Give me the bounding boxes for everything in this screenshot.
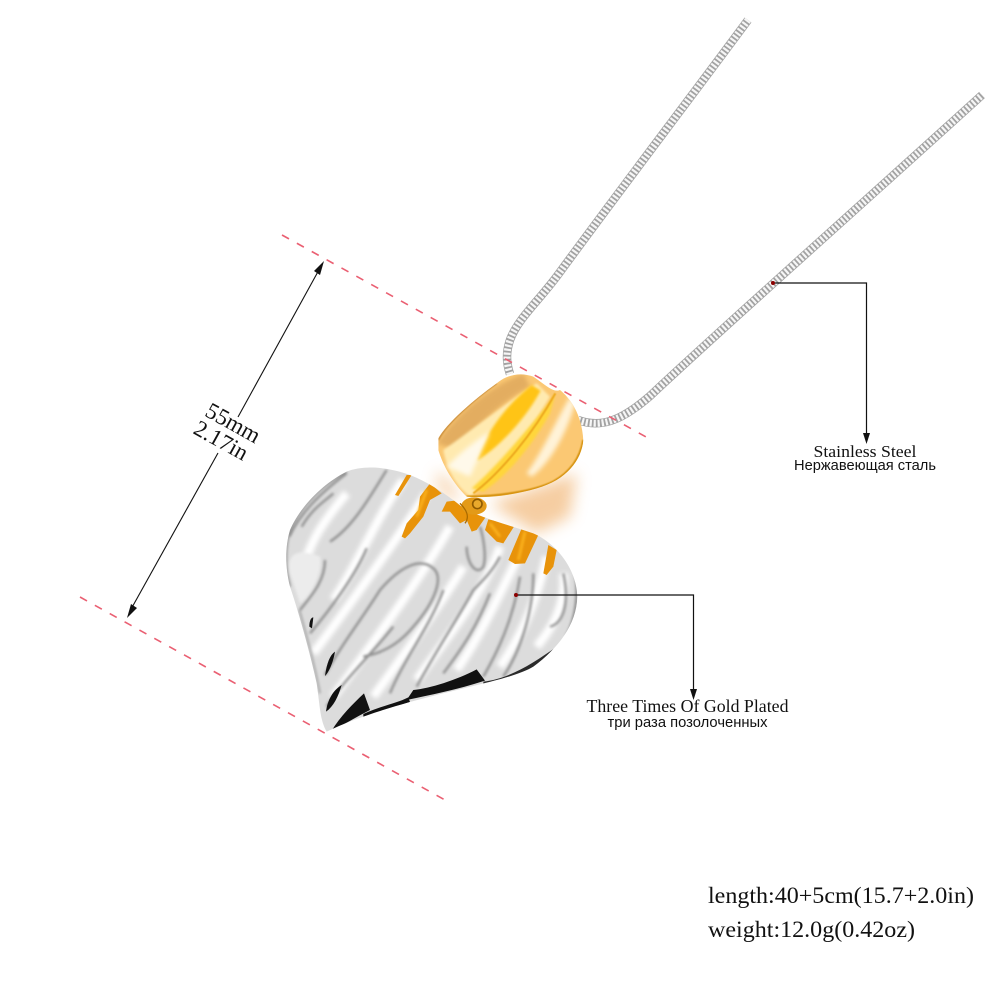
dimension label: 55mm	[201, 398, 265, 448]
specifications	[708, 883, 974, 942]
highlights	[300, 480, 564, 697]
pendant shadow	[437, 470, 577, 533]
dimension arrow	[127, 261, 324, 618]
silver heart pendant	[280, 463, 580, 737]
specifications: length:40+5cm(15.7+2.0in)	[708, 883, 974, 908]
gold plating patches	[395, 475, 557, 575]
callout: gold plated text	[586, 696, 788, 731]
gold knot link	[460, 497, 487, 523]
dimension label	[190, 398, 265, 466]
snake chain: right strand	[578, 95, 982, 423]
gold bail	[438, 374, 584, 498]
callout: gold plated leader	[514, 593, 697, 700]
callout: stainless steel text: Stainless Steel	[814, 442, 917, 461]
dimension label: 2.17in	[190, 415, 253, 466]
grey creases	[286, 470, 577, 707]
top dashed measure line	[282, 235, 648, 438]
callout: gold plated text: Three Times Of Gold Plated	[586, 696, 788, 716]
callout: stainless steel leader	[771, 281, 870, 444]
callout: gold plated text: три раза позолоченных	[608, 715, 768, 731]
specifications: weight:12.0g(0.42oz)	[708, 917, 915, 942]
bright pockets	[289, 553, 321, 603]
black accents	[309, 617, 560, 731]
callout: stainless steel text: Нержавеющая сталь	[794, 458, 936, 474]
pendant drawn in 3x zoom coordinates	[280, 367, 590, 737]
bottom dashed measure line	[80, 597, 445, 800]
callout: stainless steel text	[794, 442, 936, 474]
snake chain: left strand	[507, 20, 748, 374]
